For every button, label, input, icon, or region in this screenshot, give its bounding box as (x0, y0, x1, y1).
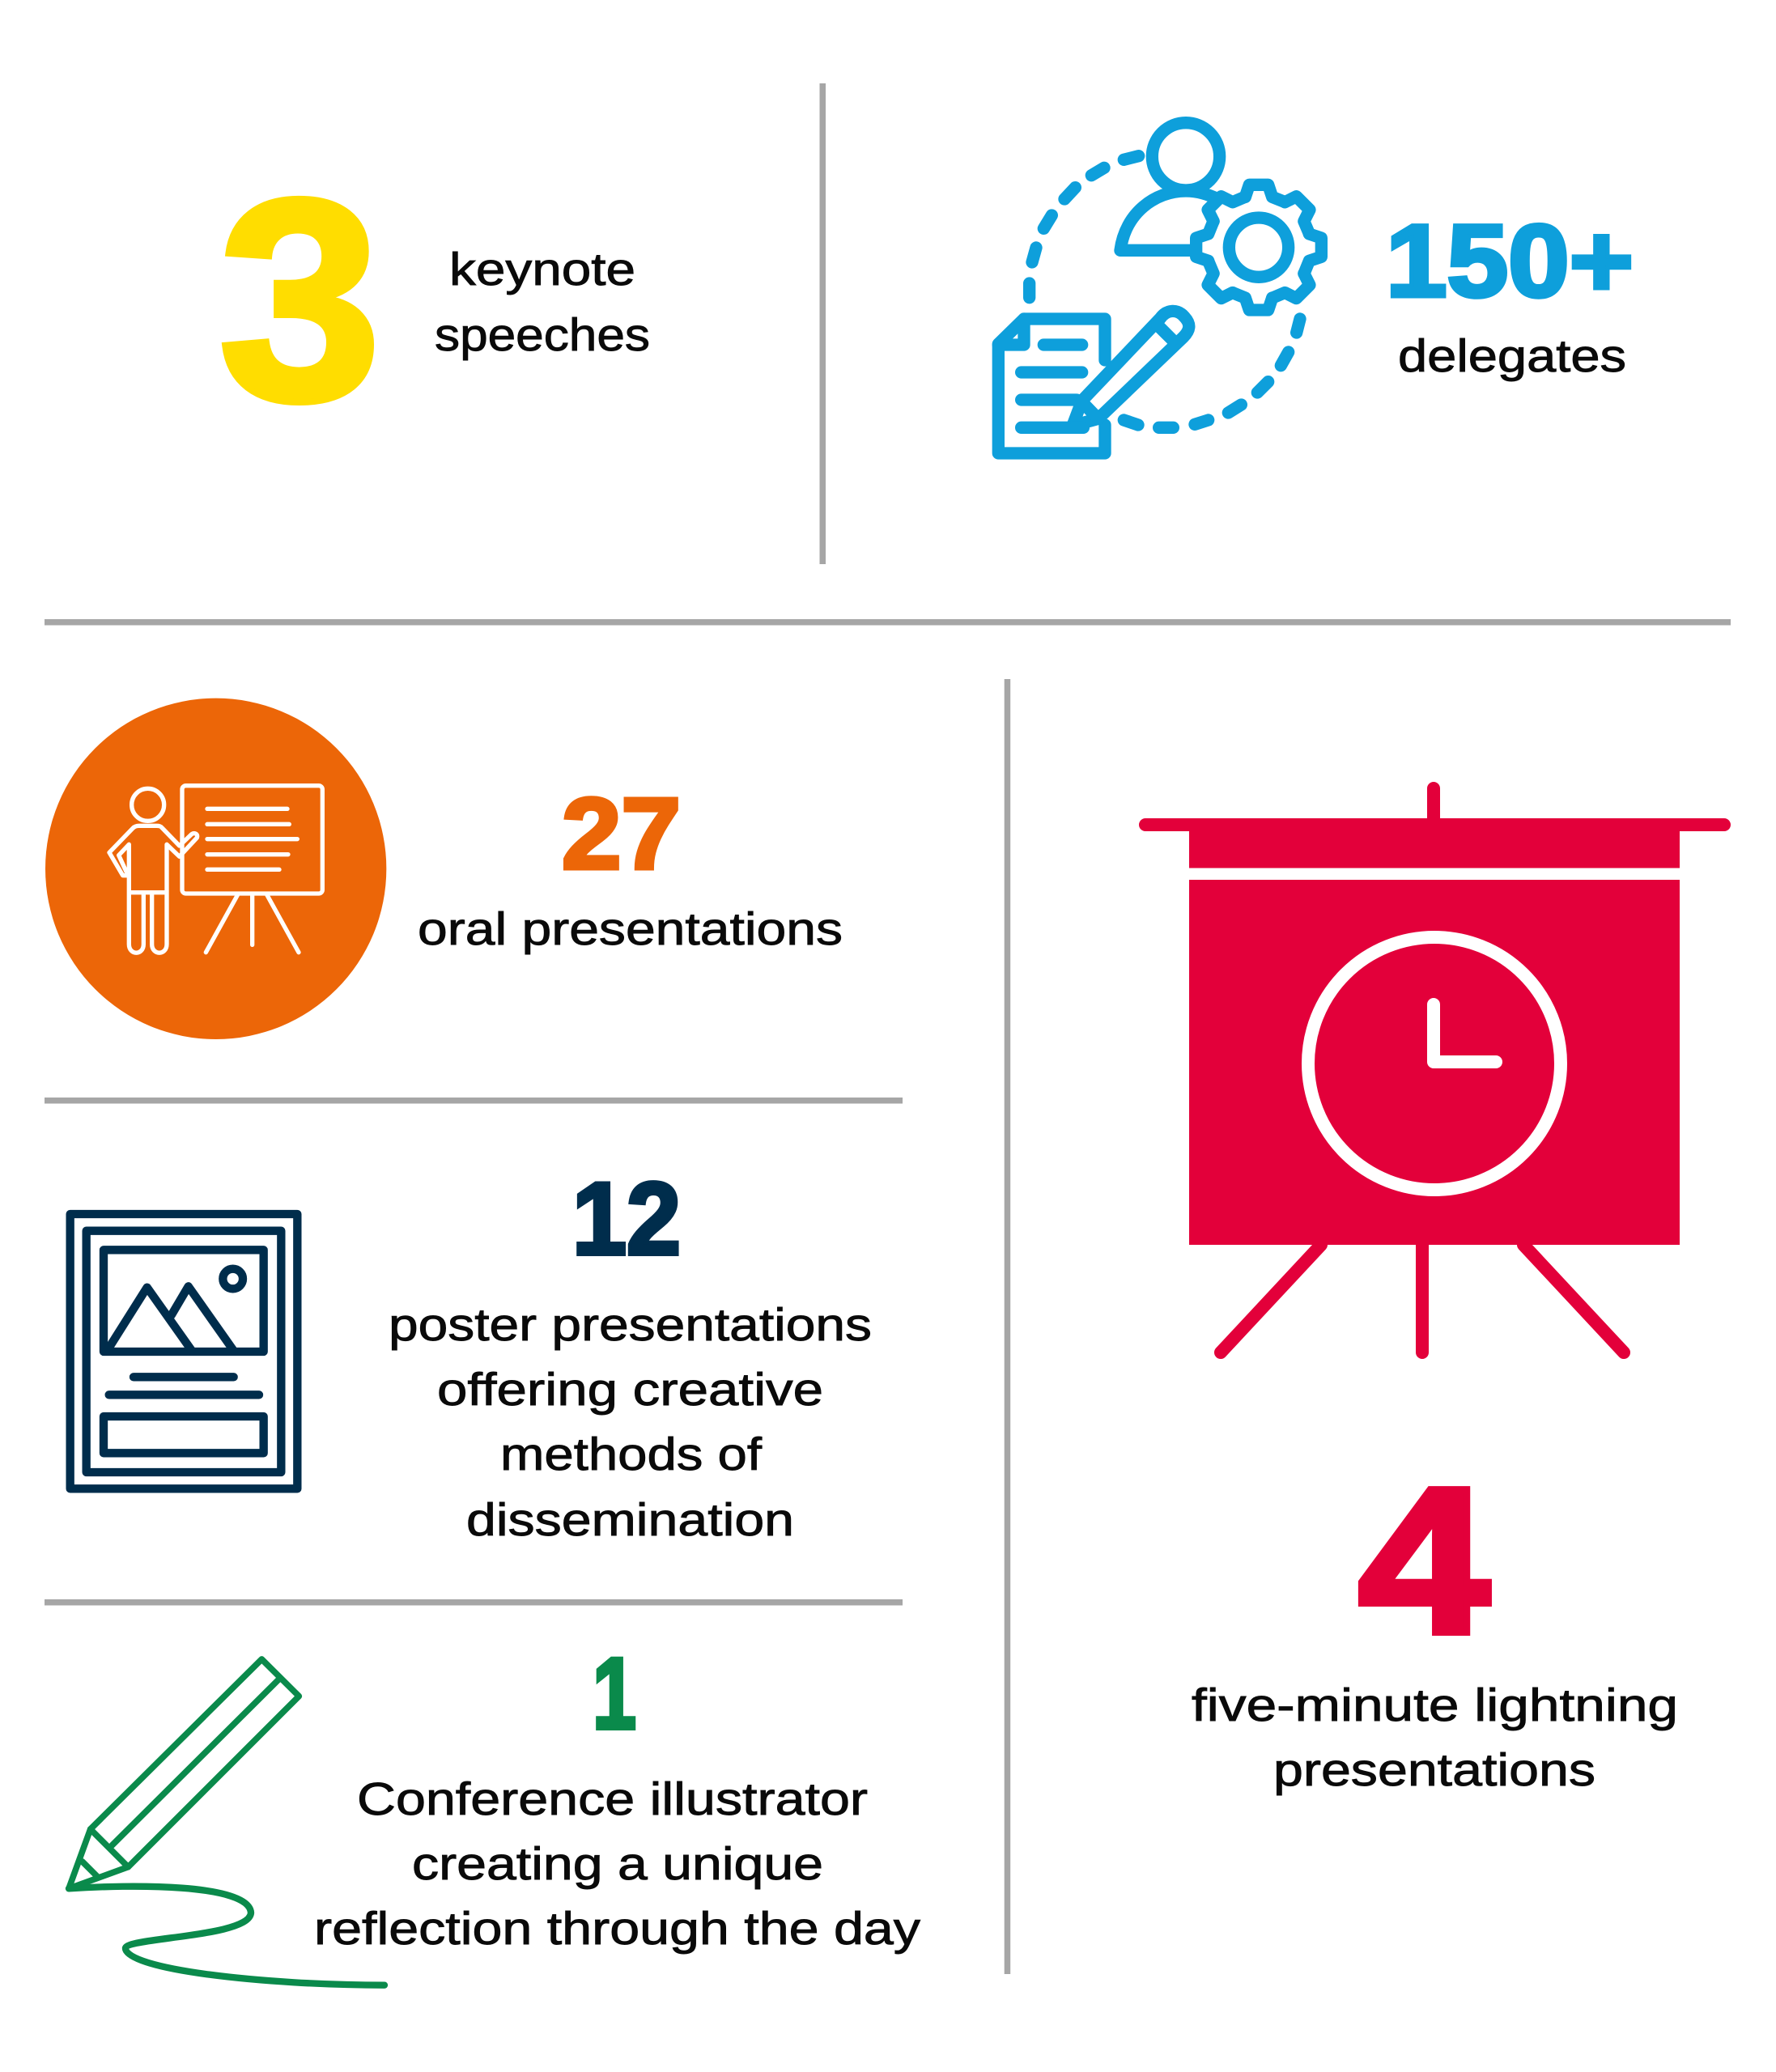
number: 27: 27 (562, 778, 681, 890)
icon: framed poster (70, 1214, 297, 1488)
text: keynote speeches: speeches (435, 309, 650, 361)
text: five-minute lightning presentations (1192, 1679, 1678, 1796)
icon: delegate with gear and document (998, 123, 1322, 453)
text: oral presentations: oral presentations (418, 903, 843, 955)
text: illustrator description (314, 1773, 921, 1955)
text: keynote speeches (435, 244, 650, 361)
text: illustrator description: reflection through the day (314, 1903, 921, 1955)
text: illustrator description: Conference illustrator (357, 1773, 868, 1825)
number: 12: 12 (572, 1161, 681, 1276)
panel: conference illustrator (69, 1638, 921, 1985)
number: 3 keynotes: 3 (219, 141, 381, 461)
number: 4: 4 (1358, 1445, 1491, 1677)
panel: oral presentations (45, 698, 843, 1039)
icon: presenter at board in orange circle (45, 698, 386, 1039)
panel: delegates (998, 123, 1634, 453)
number: 1: 1 (593, 1638, 636, 1750)
panel: keynote speeches (219, 141, 650, 461)
panel: lightning presentations (1145, 788, 1724, 1796)
text: poster presentations description: methods of (500, 1429, 762, 1480)
text: illustrator description: creating a unique (412, 1838, 823, 1890)
text: delegates: delegates (1398, 330, 1626, 382)
text: keynote speeches: keynote (449, 244, 635, 295)
text: poster presentations description (389, 1299, 872, 1546)
icon: projector screen with clock (1145, 788, 1724, 1352)
icon: pencil with squiggle (69, 1659, 385, 1985)
text: five-minute lightning presentations: presentations (1273, 1744, 1595, 1796)
panel: poster presentations (70, 1161, 872, 1546)
text: poster presentations description: dissemination (466, 1494, 794, 1546)
number: 150+ delegates: 150+ (1386, 203, 1634, 318)
text: poster presentations description: offering creative (437, 1364, 823, 1416)
text: poster presentations description: poster presentations (389, 1299, 872, 1351)
text: five-minute lightning presentations: five-minute lightning (1192, 1679, 1678, 1731)
